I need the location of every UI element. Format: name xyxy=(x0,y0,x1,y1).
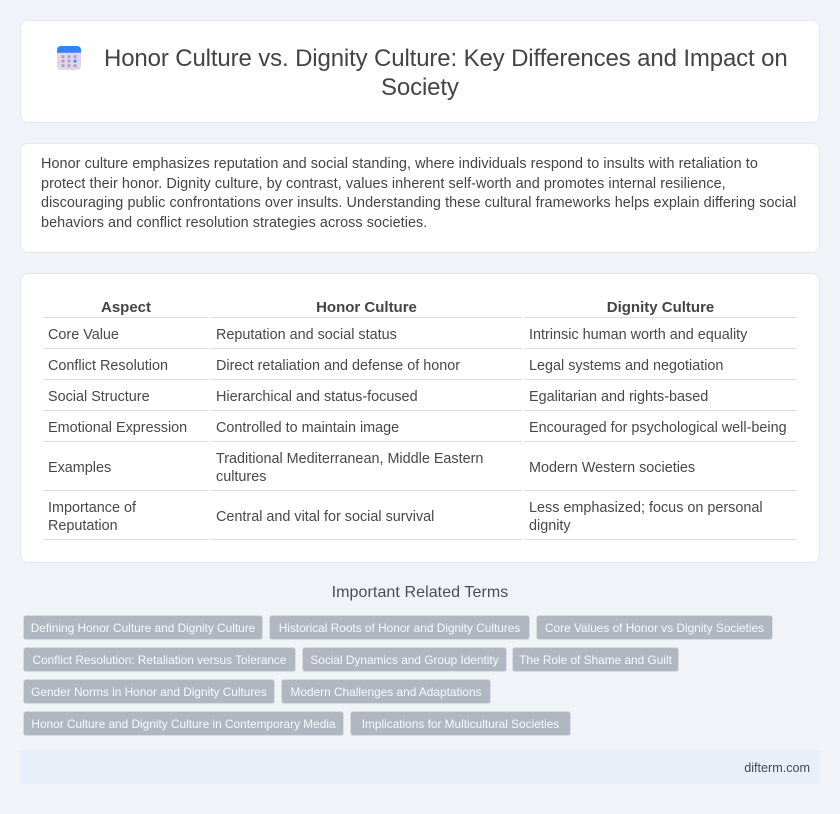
comparison table: Reputation xyxy=(48,518,118,534)
comparison table: Traditional Mediterranean, Middle Eastern xyxy=(216,451,483,467)
intro text xyxy=(41,156,796,230)
tag: Conflict Resolution: Retaliation versus Tolerance xyxy=(33,653,286,667)
intro text: discouraging public confrontations over insults. Understanding these cultural frameworks helps explain differing social xyxy=(41,195,796,211)
comparison table: cultures xyxy=(216,469,266,485)
tag xyxy=(512,647,679,672)
panel: introduction card xyxy=(20,143,820,253)
comparison table: Modern Western societies xyxy=(529,460,695,476)
tag: Modern Challenges and Adaptations xyxy=(291,685,481,699)
tag xyxy=(350,711,571,736)
comparison table: Egalitarian and rights-based xyxy=(529,389,708,405)
footer bar xyxy=(20,750,820,784)
tag: Implications for Multicultural Societies xyxy=(362,717,559,731)
title xyxy=(104,45,788,101)
tag xyxy=(281,679,491,704)
title: Honor Culture vs. Dignity Culture: Key Differences and Impact on xyxy=(104,45,788,72)
column header: Aspect: Aspect xyxy=(101,299,151,316)
comparison table: Controlled to maintain image xyxy=(216,420,399,436)
row: Emotional Expression xyxy=(48,420,787,436)
tag xyxy=(302,647,507,672)
title: Society xyxy=(381,74,459,101)
row: Core Value xyxy=(48,327,748,343)
column header: Dignity Culture: Dignity Culture xyxy=(607,299,714,316)
tag xyxy=(23,615,263,640)
comparison table: Social Structure xyxy=(48,389,150,405)
intro text: Honor culture emphasizes reputation and social standing, where individuals respond to insults with retaliation to xyxy=(41,156,758,172)
tag xyxy=(536,615,773,640)
comparison table: Hierarchical and status-focused xyxy=(216,389,418,405)
comparison table: Core Value xyxy=(48,327,119,343)
tag xyxy=(269,615,530,640)
intro text: protect their honor. Dignity culture, by contrast, values inherent self-worth and promotes internal resilience, xyxy=(41,176,726,192)
comparison table: Examples xyxy=(48,460,111,476)
column header: Honor Culture: Honor Culture xyxy=(316,299,417,316)
tag: Historical Roots of Honor and Dignity Cultures xyxy=(279,621,520,635)
comparison table: Central and vital for social survival xyxy=(216,509,434,525)
icon: calendar xyxy=(57,46,81,70)
tag xyxy=(23,679,275,704)
comparison table: Conflict Resolution xyxy=(48,358,168,374)
panel: title card xyxy=(20,20,820,123)
comparison table: Less emphasized; focus on personal xyxy=(529,500,763,516)
tag: The Role of Shame and Guilt xyxy=(519,653,672,667)
row: Importance of Reputation xyxy=(48,500,763,534)
row: Social Structure xyxy=(48,389,708,405)
comparison table: Intrinsic human worth and equality xyxy=(529,327,747,343)
comparison table: Emotional Expression xyxy=(48,420,187,436)
comparison table: Encouraged for psychological well-being xyxy=(529,420,787,436)
comparison table: Reputation and social status xyxy=(216,327,397,343)
tag: Social Dynamics and Group Identity xyxy=(310,653,499,667)
tag: Honor Culture and Dignity Culture in Contemporary Media xyxy=(31,717,336,731)
row: Conflict Resolution xyxy=(48,358,723,374)
heading: Important Related Terms: Important Related Terms xyxy=(332,584,508,601)
tag xyxy=(23,647,296,672)
comparison table: Direct retaliation and defense of honor xyxy=(216,358,460,374)
tag: Core Values of Honor vs Dignity Societies xyxy=(545,621,764,635)
intro text: behaviors and conflict resolution strategies across societies. xyxy=(41,214,427,230)
footer text: difterm.com xyxy=(744,761,810,775)
tag: Defining Honor Culture and Dignity Culture xyxy=(31,621,255,635)
panel: comparison table card xyxy=(20,273,820,563)
row: Examples xyxy=(48,451,695,485)
comparison table: dignity xyxy=(529,518,571,534)
tag: Gender Norms in Honor and Dignity Cultures xyxy=(31,685,267,699)
comparison table: Importance of xyxy=(48,500,136,516)
tag xyxy=(23,711,344,736)
comparison table: Legal systems and negotiation xyxy=(529,358,723,374)
